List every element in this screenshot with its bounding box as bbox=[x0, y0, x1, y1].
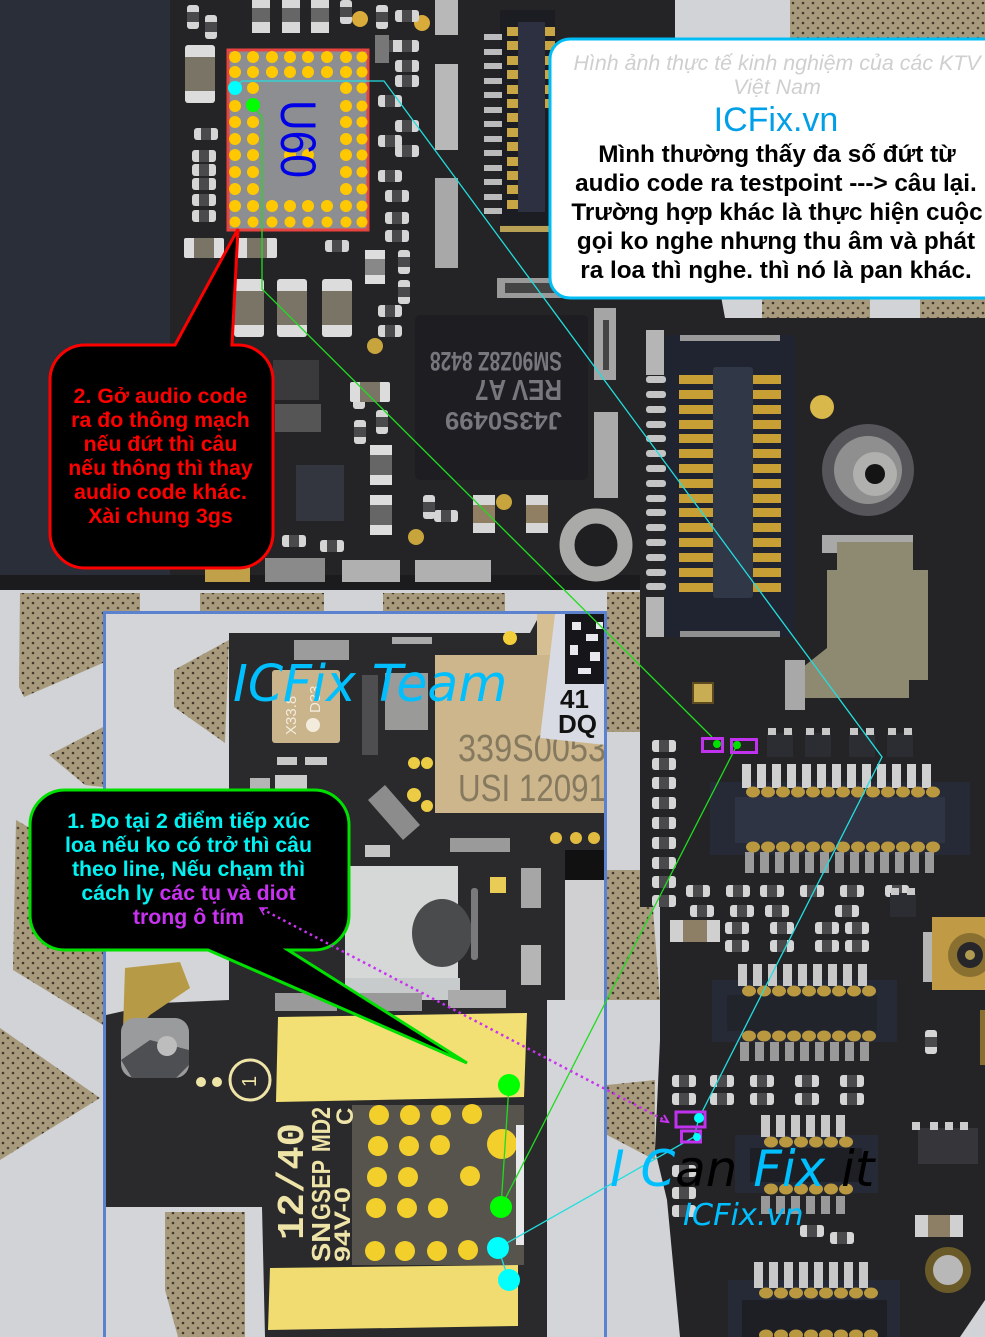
lower-right board components bbox=[652, 728, 985, 1337]
green callout: step 1: theo line, Nếu chạm thì bbox=[72, 857, 305, 881]
white callout: audio code ra testpoint ---> câu lại. bbox=[575, 170, 977, 197]
metal shield bbox=[692, 535, 928, 710]
red callout: step 2: audio code khác. bbox=[74, 480, 247, 504]
green callout: step 1: cách ly các tụ và diot bbox=[81, 881, 296, 905]
gold shield with marking: 339S0053 bbox=[458, 728, 606, 770]
solder patch and dots bbox=[352, 1104, 524, 1265]
chip with upside-down marking: REV A7 bbox=[475, 373, 562, 405]
white callout: Mình thường thấy đa số đứt từ bbox=[598, 141, 956, 168]
red callout: step 2: ra đo thông mạch bbox=[71, 408, 250, 432]
chip with upside-down marking: SM90Z8Z 8428 bbox=[430, 346, 562, 376]
silkscreen markings: GSEP bbox=[306, 1160, 336, 1220]
side components bbox=[275, 850, 605, 1011]
white callout: ra loa thì nghe. thì nó là pan khác. bbox=[580, 257, 972, 284]
trace lines bbox=[235, 81, 882, 1280]
component markers in purple boxes bbox=[676, 738, 756, 1142]
chip with upside-down marking: J43S0499 bbox=[445, 406, 562, 434]
silkscreen markings: MD2 bbox=[306, 1107, 336, 1152]
large vertical connector bbox=[646, 330, 795, 637]
white callout: Trường hợp khác là thực hiện cuộc bbox=[571, 199, 983, 226]
solder dots on U60 bbox=[229, 51, 368, 228]
gold shield with marking: USI 12091 bbox=[458, 768, 606, 810]
top connector bbox=[484, 10, 555, 232]
small components, top board bbox=[184, 0, 618, 582]
white callout bbox=[550, 39, 985, 298]
crystal and parts: D33 bbox=[307, 685, 324, 713]
barcode label: DQ bbox=[558, 709, 597, 739]
connection dots bbox=[228, 81, 741, 1291]
crystal and parts bbox=[250, 631, 600, 857]
barcode label: 41 bbox=[560, 684, 589, 714]
green callout: step 1: trong ô tím bbox=[133, 905, 244, 929]
white callout: Việt Nam bbox=[733, 75, 821, 99]
red callout: step 2: nếu đứt thì câu bbox=[84, 432, 237, 456]
washer ring bbox=[567, 516, 625, 574]
purple dotted arrow bbox=[260, 908, 668, 1122]
silkscreen markings: 94V-0 bbox=[330, 1187, 355, 1262]
gold shield with marking bbox=[435, 655, 606, 813]
white callout: ICFix.vn bbox=[714, 101, 838, 139]
inset panel: zoomed board photo bbox=[104, 612, 607, 1337]
red callout: step 2: 2. Gở audio code bbox=[74, 384, 248, 408]
silver shield patch with dark blob bbox=[345, 866, 472, 1000]
barcode label bbox=[540, 614, 606, 745]
silkscreen markings bbox=[196, 1060, 359, 1262]
green callout: step 1: loa nếu ko có trở thì câu bbox=[65, 833, 312, 857]
red callout: step 2: Xài chung 3gs bbox=[88, 504, 233, 528]
gold test pad and screw post bbox=[810, 395, 914, 516]
watermark: ICFix Team: ICFix Team bbox=[233, 654, 507, 713]
silkscreen markings: 1 bbox=[239, 1076, 261, 1087]
U60 label: U60 bbox=[270, 100, 326, 178]
silkscreen markings: C bbox=[332, 1108, 359, 1125]
chip U60 highlight bbox=[228, 50, 368, 230]
red callout: step 2: nếu thông thì thay bbox=[68, 456, 253, 480]
red callout: step 2 bbox=[50, 229, 273, 568]
green callout: step 1 bbox=[30, 790, 467, 1063]
grounding clip and post bbox=[121, 962, 190, 1078]
white callout: Hình ảnh thực tế kinh nghiệm của các KTV bbox=[573, 51, 982, 75]
silkscreen markings: SN bbox=[306, 1222, 336, 1262]
chip with upside-down marking bbox=[415, 315, 588, 480]
lower connectors bbox=[710, 764, 970, 1337]
green callout: step 1: 1. Đo tại 2 điểm tiếp xúc bbox=[67, 809, 310, 833]
yellow contact pads bbox=[276, 1013, 527, 1102]
watermark: ICFix.vn: ICFix.vn bbox=[683, 1198, 804, 1233]
watermark: I Can Fix it: I Can Fix it bbox=[610, 1140, 877, 1198]
white callout: gọi ko nghe nhưng thu âm và phát bbox=[577, 228, 975, 255]
silkscreen markings: 12/40 bbox=[272, 1123, 315, 1240]
inset frame bbox=[104, 612, 606, 1337]
crystal and parts: X33.8 bbox=[283, 696, 300, 735]
gold antenna connector bbox=[923, 917, 985, 1065]
